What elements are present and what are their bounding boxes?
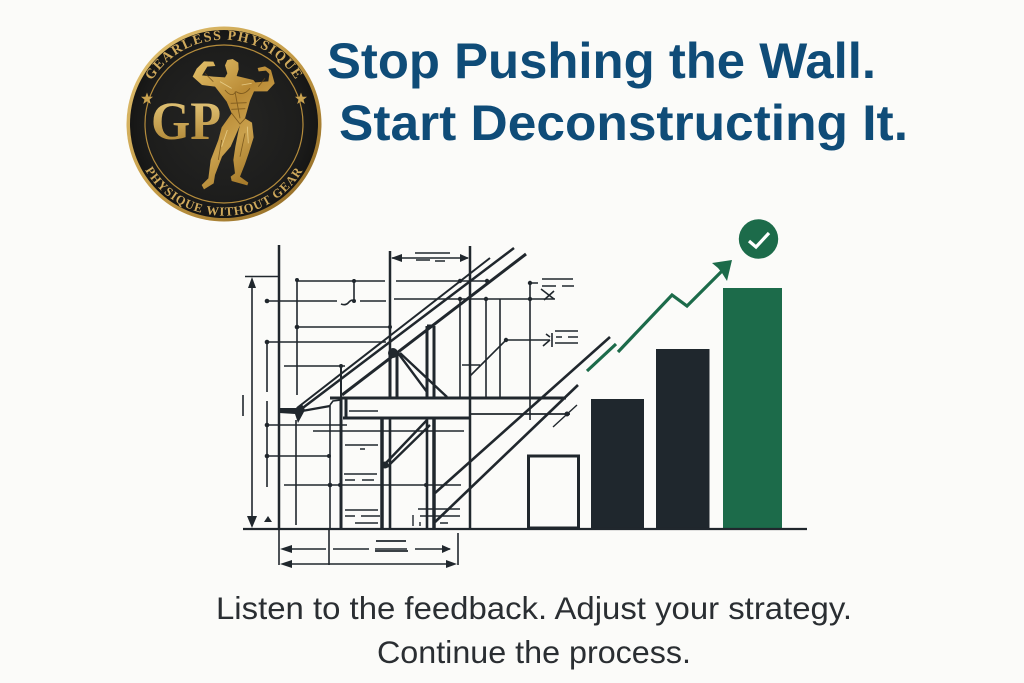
bottom dimensions (279, 529, 458, 565)
title line 2: Start Deconstructing It. (339, 95, 908, 151)
node dots (265, 278, 570, 487)
notes (344, 411, 460, 526)
columns (382, 418, 434, 528)
title (327, 33, 908, 151)
lower right diagonals (435, 337, 610, 493)
main diagonals (297, 258, 490, 408)
main verticals (279, 245, 470, 529)
left dimension (243, 276, 279, 517)
right upper lines (460, 283, 530, 420)
baseline (243, 528, 807, 530)
green bar (723, 288, 782, 528)
braces (384, 420, 430, 467)
horizontals (267, 281, 555, 485)
caption (216, 590, 852, 670)
caption line 2: Continue the process. (377, 634, 691, 670)
badge text bottom: PHYSIQUE WITHOUT GEAR (145, 166, 302, 216)
dark bar medium (656, 349, 710, 528)
caption line 1: Listen to the feedback. Adjust your strategy. (216, 590, 852, 626)
beam (330, 398, 566, 418)
badge stars (141, 92, 307, 104)
bodybuilder figure (193, 59, 275, 189)
badge text top: GEARLESS PHYSIQUE (146, 30, 302, 79)
title line 1: Stop Pushing the Wall. (327, 33, 876, 89)
badge monogram: GP (151, 91, 221, 151)
dark bar small (591, 399, 644, 528)
top dimension (392, 253, 468, 261)
green growth arrow (587, 260, 732, 371)
check badge icon (739, 219, 778, 259)
logo badge (126, 26, 322, 222)
outlined bar (528, 456, 578, 528)
bar chart (243, 288, 807, 529)
blueprint scaffold drawing (243, 245, 610, 568)
